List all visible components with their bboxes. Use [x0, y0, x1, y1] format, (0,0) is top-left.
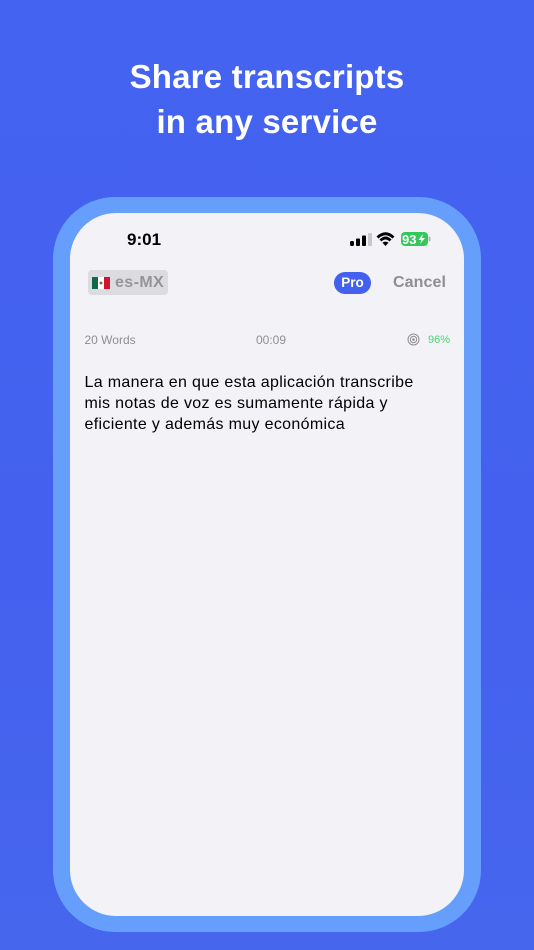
transcript text: eficiente y además muy económica [84, 416, 345, 433]
icon: Mexico flag [92, 277, 110, 289]
status icons: 93 [402, 232, 416, 247]
transcript text [84, 374, 414, 433]
pro badge [334, 272, 371, 294]
status icons [350, 232, 430, 247]
status bar time: 9:01 [127, 230, 161, 249]
duration: 00:09 [256, 333, 286, 347]
phone frame [53, 197, 481, 932]
cancel button: Cancel [393, 274, 446, 291]
title: in any service [156, 103, 378, 140]
title: Share transcripts [130, 58, 404, 95]
icon: accuracy target [408, 334, 420, 346]
language label: es-MX [115, 274, 164, 291]
transcript text: mis notas de voz es sumamente rápida y [84, 395, 388, 412]
word count: 20 Words [84, 333, 136, 347]
transcript text: La manera en que esta aplicación transcribe [84, 374, 414, 391]
pro badge: Pro [341, 275, 364, 290]
language chip [88, 270, 168, 295]
phone screen [70, 213, 464, 916]
title [130, 58, 404, 140]
accuracy value: 96% [428, 334, 450, 346]
